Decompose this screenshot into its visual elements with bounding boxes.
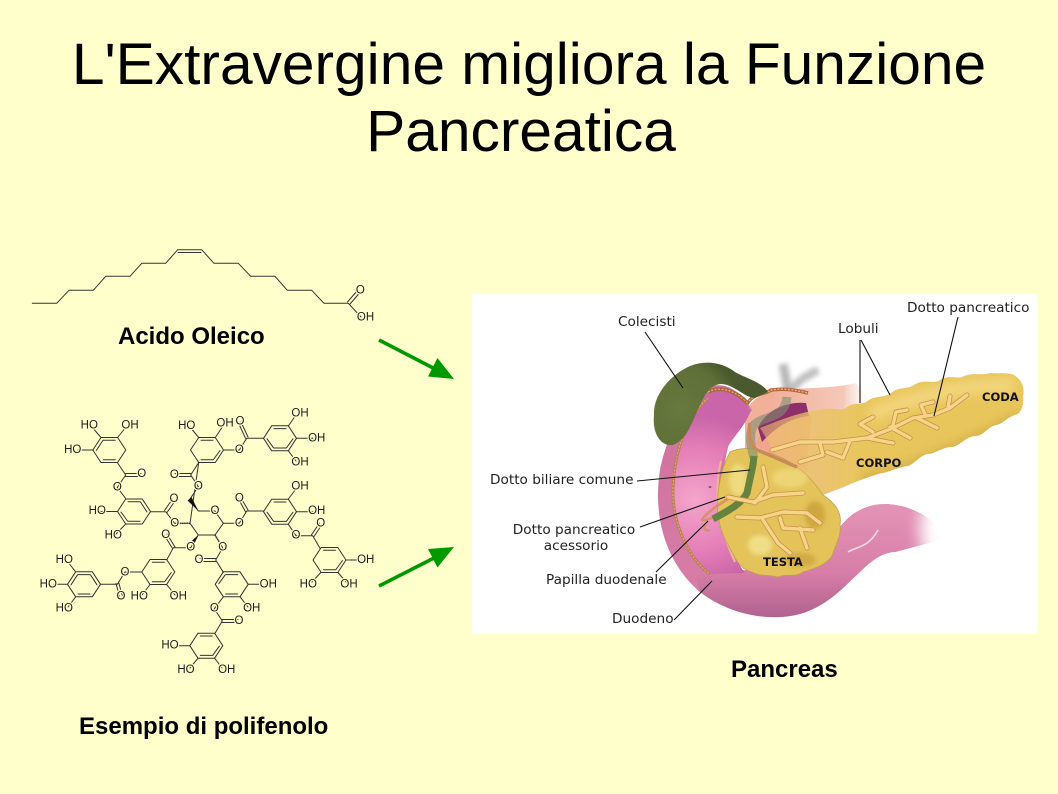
chemical structure: polyphenol: O xyxy=(235,492,244,504)
chemical structure: polyphenol: OH xyxy=(260,578,277,590)
chemical structure: polyphenol: O xyxy=(235,615,244,627)
chemical structure: polyphenol: O xyxy=(137,468,146,480)
upper grey-green duct xyxy=(751,397,787,458)
chemical structure: polyphenol: O xyxy=(235,517,244,529)
chemical structure: polyphenol: O xyxy=(121,566,130,578)
common bile duct xyxy=(713,456,754,519)
chemical structure: polyphenol: HO xyxy=(177,664,195,676)
papilla xyxy=(702,499,728,530)
vessels behind stomach xyxy=(783,364,818,400)
duodenum inner band xyxy=(749,423,797,467)
chemical structure: polyphenol: OH xyxy=(308,505,325,517)
title xyxy=(72,32,986,164)
callout labels: Dotto biliare comune xyxy=(490,472,633,488)
chemical structure: polyphenol: HO xyxy=(56,603,73,615)
chemical structure: polyphenol: HO xyxy=(131,591,148,603)
chemical structure: polyphenol: O xyxy=(218,542,227,554)
chemical structure: polyphenol: O xyxy=(170,493,179,505)
chemical structure: polyphenol: OH xyxy=(170,591,187,603)
pancreas: tail and body xyxy=(760,373,1024,495)
chemical structure: polyphenol: OH xyxy=(340,578,358,590)
chemical structure: polyphenol: HO xyxy=(64,444,81,456)
chemical structure: oleic acid xyxy=(32,250,374,324)
chemical structure: polyphenol: HO xyxy=(161,640,179,652)
chemical structure: polyphenol: O xyxy=(236,416,245,428)
atom labels: HO xyxy=(81,420,98,432)
stomach / peach tissue xyxy=(745,383,870,495)
duodenum xyxy=(658,385,1004,617)
chemical structure: polyphenol: O xyxy=(170,469,179,481)
chemical structure: oleic acid: O xyxy=(356,285,365,297)
callout labels: Dotto pancreatico xyxy=(513,522,635,538)
callout labels xyxy=(490,300,1029,627)
pancreatic ducts xyxy=(728,395,967,553)
chemical structure: polyphenol: OH xyxy=(357,554,374,566)
chemical structure: polyphenol: OH xyxy=(216,417,234,429)
panel: pancreas illustration xyxy=(472,294,1038,634)
chemical structure: polyphenol: O xyxy=(316,517,325,529)
chemical structure: polyphenol: O xyxy=(210,603,219,615)
chemical structure: polyphenol: O xyxy=(292,530,301,542)
chemical structure: polyphenol: HO xyxy=(56,554,73,566)
chemical structure: polyphenol: OH xyxy=(291,407,309,419)
label: pancreas: Pancreas xyxy=(731,656,838,683)
leader lines xyxy=(637,317,958,620)
callout labels: Duodeno xyxy=(612,611,674,627)
callout labels: Lobuli xyxy=(838,321,879,337)
callout labels: acessorio xyxy=(544,538,608,554)
chemical structure: oleic acid: OH xyxy=(357,312,374,324)
chemical structure: polyphenol: OH xyxy=(291,456,309,468)
chemical structure: polyphenol: O xyxy=(117,591,126,603)
chemical structure: polyphenol: HO xyxy=(40,578,57,590)
chemical structure: polyphenol: OH xyxy=(243,603,260,615)
chemical structure: polyphenol: O xyxy=(211,505,220,517)
fade to white xyxy=(920,480,1004,580)
glucose core stereo bonds xyxy=(188,497,198,511)
chemical structure: polyphenol: O xyxy=(235,444,244,456)
bonds xyxy=(78,427,141,499)
rings xyxy=(54,415,360,668)
arrow: oleic acid to pancreas xyxy=(379,340,454,379)
pancreas: head xyxy=(718,449,840,577)
chemical structure: polyphenol: HO xyxy=(178,420,195,432)
gallbladder xyxy=(654,363,768,445)
callout labels: Papilla duodenale xyxy=(546,572,667,588)
chemical structure: polyphenol: OH xyxy=(291,481,309,493)
title: Pancreatica xyxy=(366,99,676,164)
chemical structure: polyphenol xyxy=(40,407,374,676)
chemical structure: polyphenol: O xyxy=(161,529,170,541)
label: acido oleico: Acido Oleico xyxy=(118,323,265,350)
chemical structure: polyphenol: HO xyxy=(105,530,122,542)
chemical structure: polyphenol: OH xyxy=(308,432,325,444)
arrow: polyphenol to pancreas xyxy=(379,547,454,586)
chemical structure: polyphenol: HO xyxy=(89,505,106,517)
callout labels: Dotto pancreatico xyxy=(907,300,1029,316)
chemical structure: polyphenol: OH xyxy=(218,664,235,676)
label: esempio di polifenolo: Esempio di polifenolo xyxy=(79,713,328,740)
lumen xyxy=(673,389,750,574)
chemical structure: polyphenol: O xyxy=(195,554,204,566)
chemical structure: polyphenol: O xyxy=(170,517,179,529)
chemical structure: polyphenol: O xyxy=(186,542,195,554)
title: L'Extravergine migliora la Funzione xyxy=(72,32,986,97)
region labels: CODA xyxy=(982,390,1019,404)
chemical structure: polyphenol: OH xyxy=(121,420,139,432)
region labels: CORPO xyxy=(856,456,901,470)
callout labels: Colecisti xyxy=(618,314,676,330)
chemical structure: polyphenol: O xyxy=(113,481,122,493)
chemical structure: polyphenol: O xyxy=(194,481,203,493)
chemical structure: polyphenol: HO xyxy=(300,578,317,590)
region labels xyxy=(763,390,1019,569)
region labels: TESTA xyxy=(763,555,803,569)
